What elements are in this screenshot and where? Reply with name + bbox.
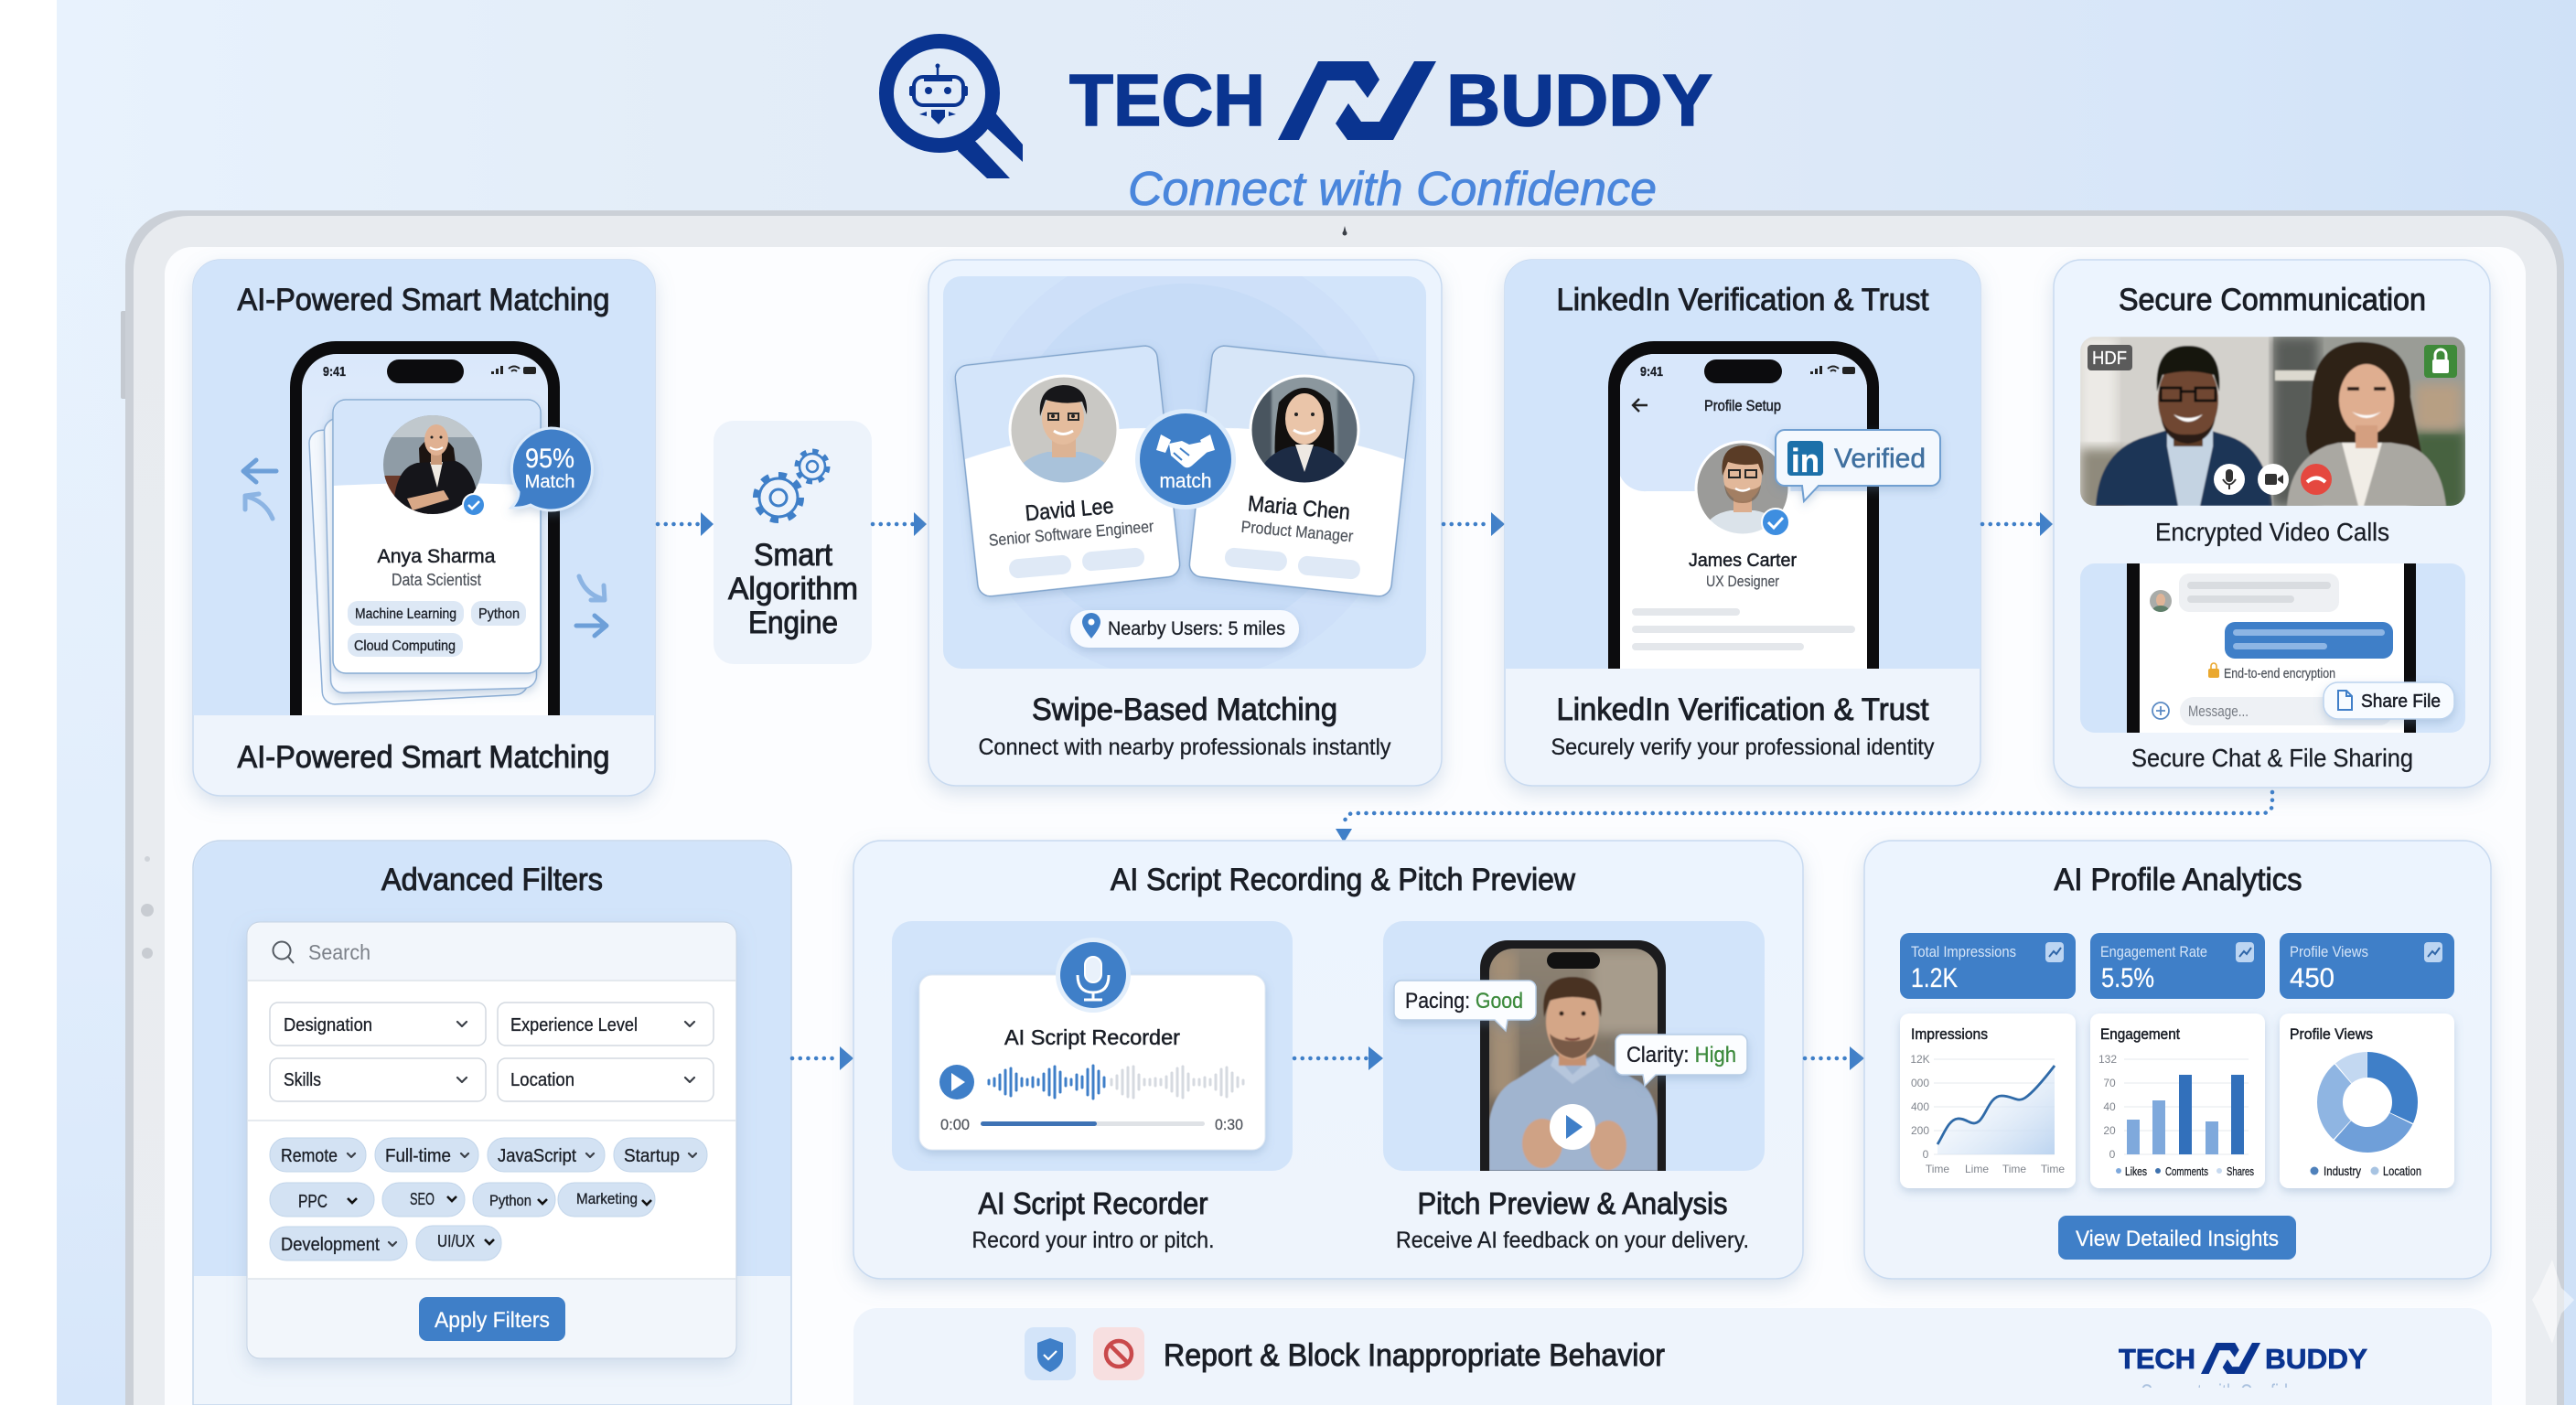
panel: AI script recording and pitch preview bbox=[853, 841, 1803, 1279]
icon: gears bbox=[756, 451, 828, 520]
description: Securely verify your professional identity bbox=[1551, 735, 1935, 760]
stat: engagement rate: Engagement Rate bbox=[2100, 943, 2207, 960]
callout: clarity bbox=[1615, 1035, 1747, 1086]
profile name: Anya Sharma bbox=[377, 546, 496, 567]
profile role: UX Designer bbox=[1706, 573, 1779, 590]
panel: LinkedIn verification bbox=[1505, 260, 1980, 786]
arrow: script to analytics bbox=[1805, 1046, 1864, 1070]
line chart: impressions: 0 bbox=[1923, 1148, 1929, 1161]
engine label: Smart bbox=[754, 538, 833, 573]
report text: Report & Block Inappropriate Behavior bbox=[1164, 1338, 1665, 1373]
badge: verified bbox=[1762, 509, 1789, 536]
nearby users pill bbox=[1070, 610, 1299, 648]
recorder image panel: AI Script Recorder bbox=[1004, 1025, 1180, 1049]
panel: AI-powered smart matching bbox=[193, 260, 655, 796]
bar chart: engagement: 20 bbox=[2103, 1124, 2116, 1137]
filter chips: Development bbox=[281, 1235, 380, 1255]
header logo: magnifier robot icon bbox=[886, 41, 1023, 178]
phone mockup with profile: 9:41 bbox=[323, 364, 346, 380]
pitch heading: Pitch Preview & Analysis bbox=[1418, 1186, 1727, 1220]
donut chart: profile views: Location bbox=[2383, 1164, 2421, 1178]
profile card: David Lee: Senior Software Engineer bbox=[988, 517, 1154, 550]
panel: secure communication bbox=[2054, 260, 2490, 788]
phone video bbox=[1480, 940, 1674, 1171]
chat mockup bbox=[2080, 563, 2465, 733]
arrow: swipe to linkedin bbox=[1444, 512, 1505, 536]
icon: block bbox=[1093, 1327, 1144, 1380]
donut chart: profile views bbox=[2280, 1014, 2454, 1188]
filter chips: Marketing bbox=[576, 1190, 638, 1207]
footer logo bbox=[2119, 1343, 2367, 1375]
stat: profile views bbox=[2280, 933, 2454, 999]
engine label: Engine bbox=[748, 606, 838, 640]
filter chips: SEO bbox=[410, 1190, 435, 1208]
arrow: filters to script bbox=[792, 1046, 853, 1070]
apply filters button: Apply Filters bbox=[435, 1308, 550, 1333]
recorder heading: AI Script Recorder bbox=[979, 1186, 1208, 1220]
line chart: impressions: 12K bbox=[1910, 1053, 1930, 1066]
engine label bbox=[728, 538, 858, 640]
panel: advanced filters bbox=[193, 841, 791, 1405]
arrow: engine to swipe bbox=[873, 512, 927, 536]
heading: top: AI-Powered Smart Matching bbox=[238, 283, 609, 317]
bar chart: engagement: 0 bbox=[2109, 1148, 2116, 1161]
tagline: Connect with Confidence bbox=[1128, 163, 1657, 216]
filter chips: Remote bbox=[281, 1146, 338, 1166]
stat: engagement rate: 5.5% bbox=[2101, 963, 2154, 993]
profile card: David Lee: David Lee bbox=[1025, 494, 1115, 526]
progress bar: 0:30 bbox=[1215, 1116, 1243, 1133]
stat: engagement rate bbox=[2090, 933, 2265, 999]
heading: bottom: AI-Powered Smart Matching bbox=[238, 740, 609, 775]
description: Connect with nearby professionals instantly bbox=[979, 735, 1391, 760]
icon: microphone bbox=[1056, 938, 1131, 1013]
stat: total impressions: Total Impressions bbox=[1911, 943, 2016, 960]
footer logo: BUDDY bbox=[2265, 1343, 2367, 1375]
bar chart: engagement: 132 bbox=[2098, 1053, 2117, 1066]
search field: Search bbox=[308, 940, 370, 964]
donut chart: profile views: Industry bbox=[2324, 1164, 2361, 1178]
arrow: matching to engine bbox=[658, 512, 714, 536]
header wordmark: TECH bbox=[1069, 59, 1265, 141]
dropdowns bbox=[270, 1003, 714, 1101]
play button bbox=[939, 1065, 974, 1099]
pitch description: Receive AI feedback on your delivery. bbox=[1396, 1228, 1749, 1253]
phone mockup bbox=[1608, 341, 1879, 669]
profile card: Maria Chen: Maria Chen bbox=[1247, 491, 1351, 525]
filter chips bbox=[270, 1138, 707, 1260]
callout: pacing bbox=[1394, 981, 1536, 1031]
arrow: linkedin to secure bbox=[1982, 512, 2053, 536]
placeholder lines bbox=[1632, 608, 1855, 650]
heading: Swipe-Based Matching bbox=[1032, 692, 1337, 727]
match bubble: 95%: 95% bbox=[525, 444, 574, 474]
search field bbox=[273, 940, 370, 964]
dropdowns: Skills bbox=[284, 1070, 321, 1090]
profile name: James Carter bbox=[1689, 551, 1797, 571]
line chart: impressions: Time bbox=[2002, 1163, 2026, 1175]
panel: swipe-based matching bbox=[928, 242, 1442, 786]
avatar: James Carter bbox=[1698, 443, 1787, 534]
line chart: impressions: 200 bbox=[1911, 1124, 1929, 1137]
video label: Encrypted Video Calls bbox=[2155, 518, 2389, 546]
line chart: impressions: Lime bbox=[1965, 1163, 1989, 1175]
line chart: impressions: Impressions bbox=[1911, 1025, 1988, 1043]
arrow: recorder to pitch bbox=[1294, 1046, 1383, 1070]
panel: report and footer bbox=[853, 1308, 2492, 1405]
chat mockup: Message... bbox=[2188, 702, 2249, 720]
bar chart: engagement: Likes bbox=[2125, 1164, 2147, 1178]
swipe arrows bbox=[243, 460, 606, 636]
view detailed insights button bbox=[2058, 1216, 2296, 1260]
bar chart: engagement: Engagement bbox=[2100, 1025, 2180, 1043]
header wordmark: BUDDY bbox=[1446, 59, 1712, 141]
line chart: impressions: 000 bbox=[1911, 1077, 1929, 1089]
match badge: match bbox=[1160, 469, 1211, 492]
footer logo: TECH bbox=[2119, 1343, 2195, 1375]
dropdowns: Designation bbox=[284, 1015, 372, 1035]
filter chips: UI/UX bbox=[437, 1232, 475, 1250]
skill tags: Python bbox=[478, 606, 520, 622]
filter chips: Full-time bbox=[385, 1146, 451, 1166]
donut chart: profile views: Profile Views bbox=[2290, 1025, 2373, 1043]
stat: profile views: 450 bbox=[2290, 963, 2334, 993]
share file pill: Share File bbox=[2361, 692, 2441, 712]
match bubble: 95% bbox=[511, 428, 592, 510]
dropdowns: Location bbox=[510, 1070, 574, 1090]
panel: smart algorithm engine bbox=[714, 421, 872, 664]
bar chart: engagement: Shares bbox=[2227, 1164, 2254, 1178]
filter chips: JavaScript bbox=[498, 1146, 576, 1166]
line chart: impressions: Time bbox=[1926, 1163, 1949, 1175]
skill tags: Cloud Computing bbox=[354, 638, 456, 654]
dropdowns: Experience Level bbox=[510, 1015, 638, 1035]
profile card: Maria Chen bbox=[1188, 345, 1415, 597]
share file pill bbox=[2324, 682, 2454, 719]
LinkedIn verified bubble bbox=[1776, 430, 1940, 501]
video call image bbox=[2080, 337, 2466, 512]
match badge bbox=[1135, 409, 1236, 509]
callout: pacing: Pacing: Good bbox=[1405, 989, 1523, 1014]
filter chips: Python bbox=[489, 1192, 531, 1209]
badge: verified bbox=[463, 494, 485, 516]
stat: total impressions: 1.2K bbox=[1911, 963, 1958, 993]
bar chart: engagement: 70 bbox=[2103, 1077, 2116, 1089]
recorder description: Record your intro or pitch. bbox=[971, 1228, 1215, 1253]
bar chart: engagement bbox=[2090, 1014, 2265, 1188]
call buttons bbox=[2214, 464, 2332, 495]
filter chips: Startup bbox=[624, 1146, 680, 1166]
avatar: Anya Sharma bbox=[383, 415, 482, 514]
match bubble: 95%: Match bbox=[525, 472, 574, 492]
skill tags: Machine Learning bbox=[355, 606, 456, 622]
engine label: Algorithm bbox=[728, 572, 858, 606]
header wordmark bbox=[1069, 59, 1712, 141]
progress bar: 0:00 bbox=[940, 1116, 970, 1133]
pitch image panel bbox=[1383, 921, 1765, 1171]
progress bar bbox=[940, 1116, 1243, 1133]
nearby users pill: Nearby Users: 5 miles bbox=[1108, 618, 1285, 639]
phone mockup: 9:41 bbox=[1640, 364, 1663, 380]
stat: total impressions bbox=[1900, 933, 2076, 999]
line chart: impressions: Time bbox=[2041, 1163, 2065, 1175]
profile card: Maria Chen: Product Manager bbox=[1240, 518, 1354, 545]
heading: top: LinkedIn Verification & Trust bbox=[1557, 283, 1929, 317]
icon: lock bbox=[2424, 345, 2457, 378]
filter form bbox=[247, 922, 736, 1358]
skill tags bbox=[348, 601, 526, 657]
heading: Secure Communication bbox=[2119, 283, 2426, 317]
callout: clarity: Clarity: High bbox=[1626, 1043, 1736, 1067]
bar chart: engagement: 40 bbox=[2103, 1100, 2116, 1113]
HD badge: HDF bbox=[2092, 349, 2127, 369]
stat: profile views: Profile Views bbox=[2290, 943, 2368, 960]
panel: AI profile analytics bbox=[1864, 841, 2491, 1279]
icon: shield bbox=[1025, 1327, 1076, 1380]
heading: AI Profile Analytics bbox=[2055, 863, 2302, 897]
chat mockup: End-to-end encryption bbox=[2224, 666, 2335, 681]
apply filters button bbox=[419, 1297, 565, 1341]
phone mockup with profile bbox=[290, 341, 560, 715]
profile card: David Lee bbox=[954, 345, 1181, 597]
filter chips: PPC bbox=[298, 1192, 327, 1212]
LinkedIn verified bubble: Verified bbox=[1834, 444, 1926, 474]
recorder image panel bbox=[892, 921, 1293, 1171]
chat avatar bbox=[2150, 590, 2172, 612]
arrow: secure communication back to script recording bbox=[1336, 792, 2272, 842]
HD badge bbox=[2088, 345, 2132, 370]
view detailed insights button: View Detailed Insights bbox=[2076, 1227, 2279, 1251]
line chart: impressions: 400 bbox=[1911, 1100, 1929, 1113]
chat label: Secure Chat & File Sharing bbox=[2131, 744, 2413, 772]
heading: Advanced Filters bbox=[381, 863, 603, 897]
audio waveform bbox=[989, 1066, 1243, 1099]
footer tagline, clipped: Connect with Confidence bbox=[2141, 1380, 2324, 1405]
video play button bbox=[1550, 1104, 1595, 1150]
heading: bottom: LinkedIn Verification & Trust bbox=[1557, 692, 1929, 727]
LinkedIn verified bubble: in bbox=[1791, 442, 1819, 479]
avatar ring bbox=[1696, 442, 1789, 535]
phone mockup: Profile Setup bbox=[1704, 397, 1781, 414]
heading: AI Script Recording & Pitch Preview bbox=[1111, 863, 1575, 897]
line chart: impressions bbox=[1900, 1014, 2076, 1188]
profile role: Data Scientist bbox=[392, 571, 481, 589]
bar chart: engagement: Comments bbox=[2165, 1164, 2208, 1178]
